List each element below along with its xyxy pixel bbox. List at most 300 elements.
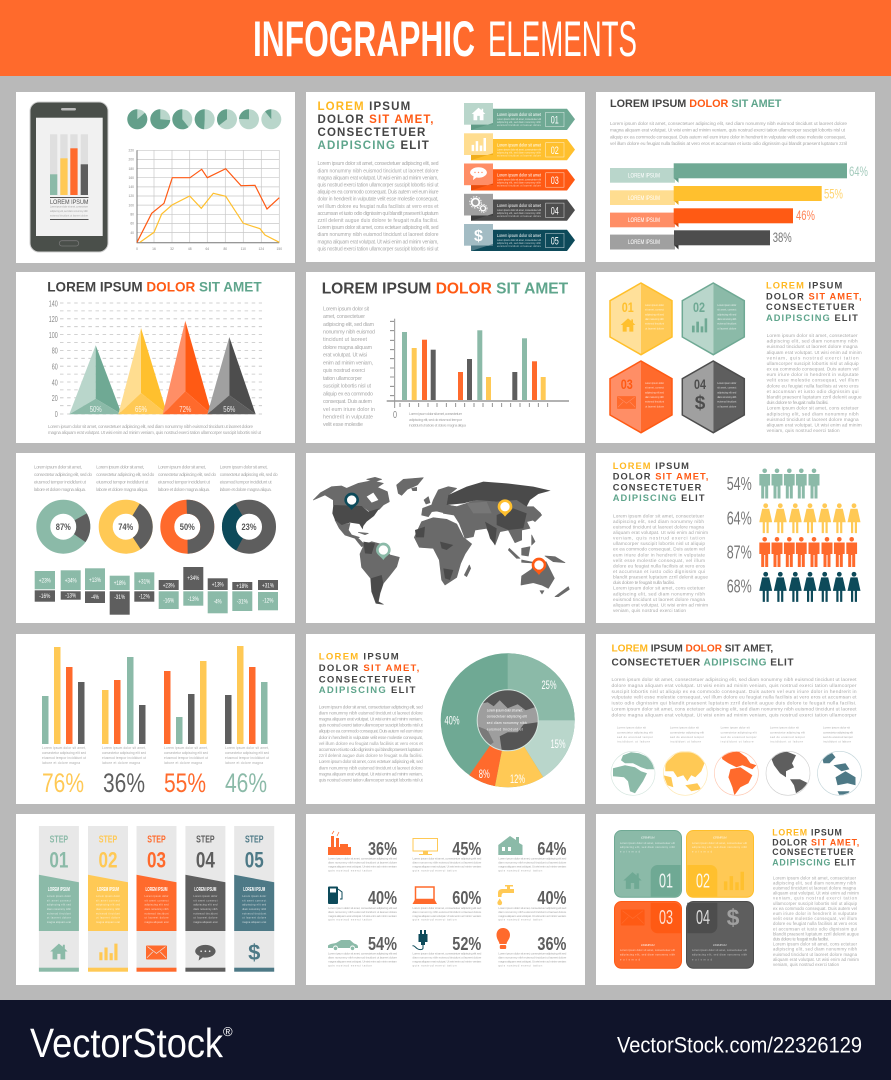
step 03: LOREM IPSUM (146, 887, 168, 893)
step 01: diam nonummy nibh (47, 908, 72, 911)
step 01: ut laoreet dolore (47, 917, 72, 920)
text block: amet, consectetuer (323, 314, 365, 320)
text block: Lorem ipsum dolor sit amet, cons ectetuer adipiscing elit, sed (319, 759, 423, 764)
stat: laptop 60%: quis nostrud exerci tation (412, 918, 457, 922)
hexagon 01: euismod tincidunt (645, 323, 664, 326)
tile bars: -13% (65, 592, 77, 600)
stat: house 64%: quis nostrud exerci tation (498, 868, 543, 872)
stat: plug 52%: magna aliquam erat volutpat. Ut wisi enim ad minim veniam (412, 960, 482, 964)
heading: CONSECTETUER (318, 127, 427, 139)
text block: Lorem ipsum dolor sit amet, cons ectetuer (767, 406, 859, 411)
heading: LOREM IPSUM DOLOR SIT AMET (47, 279, 262, 294)
mini text columns: consectetur adipiscing elit (770, 730, 805, 734)
step 03 (136, 826, 176, 972)
stat: house 64%: magna aliquam erat volutpat. Ut wisi enim ad minim veniam (498, 864, 567, 868)
text block (773, 875, 860, 967)
footer bar (0, 1000, 891, 1080)
text block: eum iriure dolor in hendrerit in vulputate (613, 552, 705, 557)
panel: five globes (596, 634, 875, 804)
line chart: 64 (205, 247, 209, 251)
line chart: 0 (136, 247, 138, 251)
text columns: consectetur adipiscing elit, sed do (220, 472, 278, 477)
bar group 36% (102, 657, 146, 798)
globe teal (611, 751, 655, 795)
heading: LOREM IPSUM (319, 652, 400, 663)
text block: adipiscing elit, sed diam (323, 322, 375, 328)
bar group 76%: 76% (42, 768, 84, 798)
text block: ex ea commodo consequat. Duis autem vel (773, 906, 857, 911)
step 03: euismod tincidunt (144, 912, 169, 915)
stat: fuel pump 40%: 40% (368, 888, 397, 908)
globe navy (818, 751, 862, 795)
arrow 05: Lorem ipsum dolor sit amet (497, 233, 542, 238)
tile bars: +18% (114, 580, 126, 587)
step 04: adipiscing elit sed (193, 904, 218, 907)
arrow 02: Lorem ipsum dolor sit amet (497, 142, 542, 147)
arrow 04: 04 (551, 205, 559, 217)
mini text columns: Lorem ipsum dolor sit (770, 726, 799, 730)
text block: dolore eu feugiat nulla facilisis at vero eros (773, 921, 857, 926)
arrow 05: Lorem ipsum dolor sit amet, consectetuer elit (497, 239, 541, 242)
text block: tincidunt ut laoreet (323, 337, 368, 343)
donut 23% (222, 499, 276, 554)
pin: australia (532, 558, 546, 575)
text block: erat volutpat. Ut wisi (323, 353, 367, 359)
square 01: euismod (620, 850, 641, 854)
mini text columns: sed do eiusmod tempor (617, 735, 653, 739)
triangle 72%: 72% (179, 405, 191, 414)
line chart: 150 (277, 247, 282, 251)
square 01: LOREM IPSUM (641, 836, 655, 840)
square 03: Lorem ipsum dolor sit amet, consectetuer elit (620, 949, 675, 952)
stat: factory 36%: quis nostrud exerci tation (328, 868, 372, 872)
text block: zzril delenit augue duis dolore te feugait nulla facilisi. (319, 753, 423, 758)
text block: eum iriure dolor in hendrerit in vulputate (767, 372, 859, 377)
text block: Lorem ipsum dolor sit amet, cons ectetuer (773, 942, 858, 947)
line chart: 40 (130, 231, 134, 235)
arrow 02 (464, 133, 575, 160)
text block: magna aliquam erat volutpat. Ut wisi enim ad minim veniam, (318, 175, 438, 181)
stat: laptop 60% (412, 887, 482, 922)
bar group 46% (225, 646, 269, 798)
square 04: euismod (692, 958, 713, 961)
tile bars: -31% (237, 598, 248, 606)
text block: et accumsan et iusto odio dignissim qui (773, 926, 857, 931)
heading: LOREM IPSUM DOLOR SIT AMET (610, 98, 782, 110)
text block: quis nostrud exerci tation ullamcorper suscipit lobortis nisl ut (319, 778, 424, 782)
stat: laptop 60%: diam nonummy nibh euismod tincidunt ut laoreet dolore (412, 910, 482, 914)
text columns (34, 464, 278, 492)
tile bars: +13% (212, 582, 224, 588)
mini text columns: Lorem ipsum dolor sit (823, 726, 850, 730)
arrow 03: Lorem ipsum dolor sit amet (497, 172, 542, 178)
square 04: LOREM IPSUM (713, 943, 727, 947)
arrow 05: euismod tincidunt ut laoreet dolore (497, 245, 542, 248)
step 05: Lorem ipsum dolor (242, 895, 266, 898)
triangle 56% (207, 337, 256, 414)
panel: five steps (16, 814, 295, 985)
text block: Lorem ipsum dolor sit amet, consectetuer (767, 333, 858, 338)
hexagon 01 (610, 283, 672, 355)
step 02: 02 (98, 847, 118, 872)
step 04: sit amet consect (193, 899, 218, 902)
hexagon 03 (610, 361, 672, 433)
mini text columns: consectetur adipiscing elit (617, 730, 653, 734)
text block: velit esse molestie consequat, vel illum (767, 378, 859, 383)
stat: fuel pump 40%: Lorem ipsum dolor sit amet, consectetuer adipiscing elit sed (328, 906, 397, 910)
text block: Lorem ipsum dolor sit amet, consectetuer adipiscing elit, sed diam nonummy nibh euismod tincidunt ut laoreet dolore (48, 424, 253, 429)
donut 50% (167, 507, 207, 547)
text block: aliquam erat volutpat. Ut wisi enim ad minim (613, 602, 708, 607)
tile bars: -4% (214, 598, 222, 606)
heading: LOREM IPSUM (613, 461, 690, 471)
hexagon 03: sit amet, consect (645, 387, 664, 390)
arrow 02: euismod tincidunt ut laoreet dolore (497, 154, 542, 157)
tile bars: -12% (262, 598, 274, 604)
square 04: Lorem ipsum dolor sit amet, consectetuer elit (692, 949, 747, 952)
panel: numbered arrows (306, 92, 585, 262)
text block: consequat. Duis autem (323, 399, 373, 405)
arrow 01: Lorem ipsum dolor sit amet, consectetuer elit (497, 118, 541, 121)
hexagon 01: diam nonummy nibh (645, 318, 665, 321)
mini text columns: incididunt ut labore (617, 740, 650, 744)
step 04 (185, 826, 225, 972)
panel: world map (306, 453, 585, 623)
bar 38%: LOREM IPSUM (628, 239, 660, 246)
text block: Lorem ipsum dolor sit amet, consectetuer (773, 875, 857, 880)
pie chart row (127, 109, 281, 129)
stat: fuel pump 40%: magna aliquam erat volutpat. Ut wisi enim ad minim veniam (328, 914, 398, 918)
stat: faucet 40%: diam nonummy nibh euismod tincidunt ut laoreet dolore (498, 910, 567, 914)
square 03 (614, 902, 682, 968)
hexagon 04 (682, 361, 744, 433)
bar group 55%: eiusmod tempor incididunt ut (164, 756, 208, 760)
panel: rounded squares (596, 814, 875, 985)
step 02: diam nonummy nibh (96, 908, 121, 911)
step 05 (234, 826, 274, 972)
step 01 (39, 826, 79, 972)
bar 46%: LOREM IPSUM (628, 217, 660, 224)
hexagon 03: diam nonummy nibh (645, 396, 665, 399)
step 03: diam nonummy nibh (144, 908, 169, 911)
hexagon 01: adipiscing elit sed (645, 313, 665, 316)
stat: monitor 45%: magna aliquam erat volutpat. Ut wisi enim ad minim veniam (412, 864, 482, 868)
text block: veniam, quis nostrud exerci tation (773, 962, 840, 967)
panel: people pictograms (596, 453, 875, 623)
bar group 76% (42, 647, 86, 798)
arrow 05 (464, 224, 575, 251)
heading: CONSECTETUER (772, 847, 854, 857)
heading (319, 652, 421, 696)
heading: LOREM IPSUM (318, 101, 411, 113)
mini text columns: Lorem ipsum dolor sit (617, 726, 646, 730)
arrow 04 (464, 194, 575, 221)
hexagon 04: adipiscing elit sed (717, 391, 737, 394)
arrow 02: adipiscing elit, sed diam nonummy nibh (497, 151, 542, 154)
stat: faucet 40%: quis nostrud exerci tation (498, 918, 543, 922)
bar group 36%: Lorem ipsum dolor sit amet, (102, 746, 146, 750)
tile bars (35, 567, 278, 615)
ring chart: 25% (542, 678, 557, 692)
step 04: LOREM IPSUM (194, 887, 216, 893)
text block: duis dolore te feugait nulla facilisi. (773, 936, 829, 942)
text block: zzril delenit augue duis dolore te feugait nulla facilisi. (318, 218, 438, 224)
people row 54% (727, 468, 820, 498)
hexagon 03: ut laoreet dolore (645, 405, 665, 408)
stat: plug 52% (412, 930, 482, 968)
arrow 03: Lorem ipsum dolor sit amet, consectetuer elit (497, 178, 541, 182)
hexagon 02: euismod tincidunt (717, 323, 737, 326)
text block: quis nostrud exerci tation ullamcorper suscipit lobortis nisl ut (319, 723, 424, 728)
text block: iusto odio dignissim qui blandit praesent luptatum zzril delenit augue duis dolore te feugait nulla facilisi. (612, 701, 856, 707)
stat: light bulb 36%: quis nostrud exerci tation (498, 964, 543, 968)
ring chart: 15% (550, 737, 566, 751)
step 02: STEP (99, 835, 117, 846)
donut 87% (36, 500, 90, 554)
heading: ADIPISCING ELIT (613, 493, 706, 503)
arrow 05: $ (474, 228, 483, 245)
chart axis labels: 0 (55, 409, 58, 419)
text block: dolore magna aliquam erat volutpat. Ut wisi enim ad minim veniam, quis nostrud exerci tation ullamcorper (612, 712, 857, 718)
step 05: $ (248, 940, 260, 965)
stat: faucet 40% (497, 885, 567, 922)
heading: CONSECTETUER ADIPISCING ELIT (612, 658, 794, 669)
text block: blandit praesent luptatum zzril delenit augue (613, 575, 708, 580)
text columns: Lorem ipsum dolor sit amet, (158, 464, 206, 469)
text block: blandit praesent luptatum zzril delenit augue (773, 931, 860, 936)
hexagon 01: ut laoreet dolore (645, 327, 665, 330)
heading: DOLOR SIT AMET, (772, 838, 860, 848)
text block: Lorem ipsum dolor sit amet, cons ectetuer adipiscing elit, sed (318, 225, 439, 231)
text block: et accumsan et iusto odio dignissim qui (767, 389, 859, 394)
step 05: diam nonummy nibh (242, 908, 267, 911)
text block: magna aliquam erat volutpat. Ut wisi enim ad minim veniam, (319, 716, 423, 722)
step 05: sit amet consect (242, 899, 266, 902)
inner globe: Lorem ipsum dolor sit amet, (487, 708, 523, 712)
arrow 03: adipiscing elit, sed diam nonummy nibh (497, 182, 542, 184)
text block: euismod tincidunt ut laoreet dolore magna (767, 417, 859, 422)
text block: vulputate velit esse molestie consequat, vel illum dolore eu feugiat nulla facilisis at vero eros et accumsan et (612, 695, 857, 701)
hexagon 04: euismod tincidunt (717, 401, 737, 404)
arrow 04: Lorem ipsum dolor sit amet (497, 203, 542, 208)
text block: euismod tincidunt ut laoreet dolore magna (613, 524, 704, 529)
hexagon 01: 01 (622, 299, 634, 315)
text block: dolore magna aliquam erat volutpat. Ut wisi enim ad minim veniam, quis nostrud exerci tation ullamcorper (612, 683, 857, 689)
arrow 03: euismod tincidunt ut laoreet dolore (497, 184, 542, 188)
text block: dolore eu feugiat nulla facilisis at vero eros (613, 563, 706, 568)
tile bars: -12% (139, 594, 150, 600)
text block (319, 704, 424, 782)
heading: CONSECTETUER (613, 482, 702, 492)
stat: factory 36%: magna aliquam erat volutpat. Ut wisi enim ad minim veniam (328, 864, 398, 868)
square 02: 02 (696, 870, 710, 892)
step 05: adipiscing elit sed (242, 904, 267, 907)
text columns: consectetur adipiscing elit, sed do (34, 472, 92, 477)
bar group 55% (164, 661, 208, 798)
step 01: STEP (50, 835, 68, 846)
panel: hexagons (596, 272, 875, 443)
line chart: 140 (128, 185, 134, 189)
text columns: Lorem ipsum dolor sit amet, (220, 464, 268, 469)
heading: DOLOR SIT AMET, (319, 663, 421, 674)
text block: aliquip ex ea commodo consequat. Duis autem vel eum iriure dolor in hendrerit in vulputate velit esse molestie consequat, (610, 134, 846, 139)
text block: velit esse molestie consequat, vel illum (773, 916, 857, 921)
donut 23%: 23% (242, 522, 257, 533)
chart axis labels: 120 (49, 314, 58, 324)
mini text columns: consectetur adipiscing elit (670, 730, 704, 734)
stat: plug 52%: 52% (452, 934, 481, 954)
arrow 01: euismod tincidunt ut laoreet dolore (497, 124, 542, 127)
bar chart (387, 319, 569, 428)
footer logo: VectorStock (30, 1020, 223, 1066)
mini text columns: Lorem ipsum dolor sit (721, 726, 750, 730)
line chart: 48 (188, 247, 192, 251)
bar group 55%: Lorem ipsum dolor sit amet, (164, 746, 208, 750)
step 02: magna aliquam erat (96, 921, 120, 924)
donut 87%: 87% (56, 522, 71, 533)
hexagon 04: 04 (694, 376, 706, 392)
text block: aliquam erat volutpat. Ut wisi enim ad minim (773, 957, 859, 962)
step 04: Lorem ipsum dolor (193, 895, 218, 898)
ring chart: 12% (510, 772, 525, 786)
people row 54%: 54% (727, 474, 752, 494)
square 03: 03 (659, 907, 673, 929)
step 04: STEP (196, 835, 215, 846)
arrow 01: adipiscing elit, sed diam nonummy nibh (497, 121, 542, 124)
text block: Lorem ipsum dolor sit amet, cons ectetuer (613, 586, 705, 591)
text block: tation ullamcorper (323, 376, 362, 382)
stat: monitor 45%: Lorem ipsum dolor sit amet, consectetuer adipiscing elit sed (412, 856, 482, 860)
arrow 05: adipiscing elit, sed diam nonummy nibh (497, 242, 542, 245)
text block: quis nostrud exerci tation ullamcorper suscipit lobortis nisl ut (318, 182, 439, 188)
text block: dolore eu feugiat nulla facilisis at vero eros (767, 383, 859, 388)
square 04: adipiscing elit, sed diam nonummy nibh (692, 954, 748, 957)
stat: car 54%: Lorem ipsum dolor sit amet, consectetuer adipiscing elit sed (328, 951, 397, 955)
text block: veniam, quis nostrud exerci tation (767, 355, 859, 360)
text block: blandit praesent luptatum zzril delenit augue (767, 394, 862, 400)
text block: veniam, quis nostrud exerci tation (773, 896, 858, 901)
text block: vel illum dolore eu feugiat nulla facilisis at vero eros et (318, 204, 439, 210)
text block: quis nostrud exerci (323, 368, 365, 374)
stat: factory 36%: 36% (368, 839, 397, 859)
hexagon 04: sit amet, consect (717, 387, 737, 390)
stat: laptop 60%: Lorem ipsum dolor sit amet, consectetuer adipiscing elit sed (412, 906, 482, 910)
step 04: euismod tincidunt (193, 912, 218, 915)
stat: laptop 60%: magna aliquam erat volutpat. Ut wisi enim ad minim veniam (412, 914, 482, 918)
heading: DOLOR SIT AMET, (318, 114, 435, 126)
bar group 46%: labore et dolore magna (225, 761, 263, 765)
text block: diam nonummy nibh euismod tincidunt ut laoreet dolore (318, 168, 439, 174)
line chart: 120 (128, 194, 134, 198)
heading: LOREM IPSUM (772, 828, 843, 838)
text block (610, 121, 847, 146)
hexagon 04: $ (695, 393, 706, 414)
step 01: magna aliquam erat (47, 921, 71, 924)
step 02: sit amet consect (96, 899, 120, 902)
stat: car 54%: quis nostrud exerci tation (328, 964, 372, 968)
chart axis labels (49, 298, 58, 419)
square 04: $ (727, 904, 740, 930)
icon: smartphone with bar chart (30, 102, 108, 252)
text block: adipiscing elit, sed diam nonummy nibh (613, 591, 705, 596)
square 03: adipiscing elit, sed diam nonummy nibh (620, 954, 676, 957)
text block (318, 161, 439, 252)
text block: Lorem ipsum dolor sit amet, consectetuer adipiscing elit, sed (319, 704, 423, 709)
heading: LOREM IPSUM DOLOR SIT AMET, (612, 644, 773, 655)
stat: house 64% (498, 836, 567, 872)
text block: nonummy nibh euismod (323, 330, 375, 336)
donut 50%: 50% (180, 522, 195, 533)
triangle 50%: 50% (90, 405, 102, 414)
line chart: 32 (170, 247, 174, 251)
arrow 02: Lorem ipsum dolor sit amet, consectetuer elit (497, 148, 541, 151)
line chart: 110 (241, 247, 246, 251)
stat: light bulb 36%: 36% (537, 934, 566, 954)
text block: quis nostrud exerci tation ullamcorper suscipit lobortis nisl ut (318, 246, 439, 252)
step 05: STEP (245, 835, 264, 846)
mini text columns: sed do eiusmod tempor (823, 735, 853, 739)
heading: CONSECTETUER (766, 302, 856, 312)
hexagon 03: 03 (621, 376, 633, 392)
hexagon 01: sit amet, consect (645, 309, 664, 312)
text block: aliquam erat volutpat. Ut wisi enim ad minim (767, 350, 862, 355)
text block: aliquam erat volutpat. Ut wisi enim ad minim (613, 530, 708, 535)
tile bars: -16% (39, 593, 51, 600)
stat: faucet 40%: Lorem ipsum dolor sit amet, consectetuer adipiscing elit sed (498, 906, 567, 910)
registered mark: ® (223, 1024, 233, 1039)
text columns: eiusmod tempor incididunt ut (220, 479, 272, 484)
heading: LOREM IPSUM DOLOR SIT AMET (322, 281, 569, 298)
text block (323, 306, 375, 428)
people row 64%: 64% (727, 509, 752, 529)
text block: euismod tincidunt ut laoreet dolore magna (773, 952, 858, 957)
panel: phone and line chart (16, 92, 295, 263)
mini text columns: consectetur adipiscing elit (823, 730, 853, 734)
square 01: Lorem ipsum dolor sit amet, consectetuer elit (620, 842, 675, 845)
mini text columns: incididunt ut labore (823, 740, 851, 744)
line chart: 16 (152, 247, 156, 251)
stat: fuel pump 40%: diam nonummy nibh euismod tincidunt ut laoreet dolore (328, 910, 397, 914)
pin: north america (344, 493, 359, 510)
tile bars: -16% (163, 598, 175, 604)
panel: donuts and tile bars (16, 453, 295, 623)
bar 55%: LOREM IPSUM (628, 195, 660, 202)
stat: car 54%: 54% (368, 934, 397, 954)
hexagon 04: diam nonummy nibh (717, 396, 737, 399)
bar group 55%: labore et dolore magna (164, 761, 202, 765)
text block (613, 513, 708, 613)
tile bars: +13% (89, 577, 101, 584)
text block: magna aliquam erat volutpat. Ut wisi enim ad minim veniam, (319, 771, 423, 776)
step 01: LOREM IPSUM (48, 887, 70, 893)
square 02: Lorem ipsum dolor sit amet, consectetuer elit (692, 842, 747, 845)
tile bars: +23% (39, 578, 51, 584)
header banner (0, 0, 891, 76)
bar group 76%: Lorem ipsum dolor sit amet, (42, 746, 86, 750)
text block: velit esse molestie consequat, vel illum (613, 558, 705, 563)
text block: aliquam erat volutpat. Ut wisi enim ad minim (767, 422, 862, 428)
square 01: adipiscing elit, sed diam nonummy nibh (620, 846, 676, 849)
step 05: euismod tincidunt (242, 912, 266, 915)
text block: Lorem ipsum dolor sit (323, 306, 370, 312)
stat: monitor 45%: diam nonummy nibh euismod tincidunt ut laoreet dolore (412, 860, 482, 864)
panel: bars with percentages (16, 634, 295, 804)
panel: horizontal bars (596, 92, 875, 262)
heading: LOREM IPSUM (766, 281, 843, 291)
step 05: magna aliquam erat (242, 921, 266, 924)
stat: monitor 45% (412, 838, 482, 872)
step 04: 04 (196, 847, 215, 872)
